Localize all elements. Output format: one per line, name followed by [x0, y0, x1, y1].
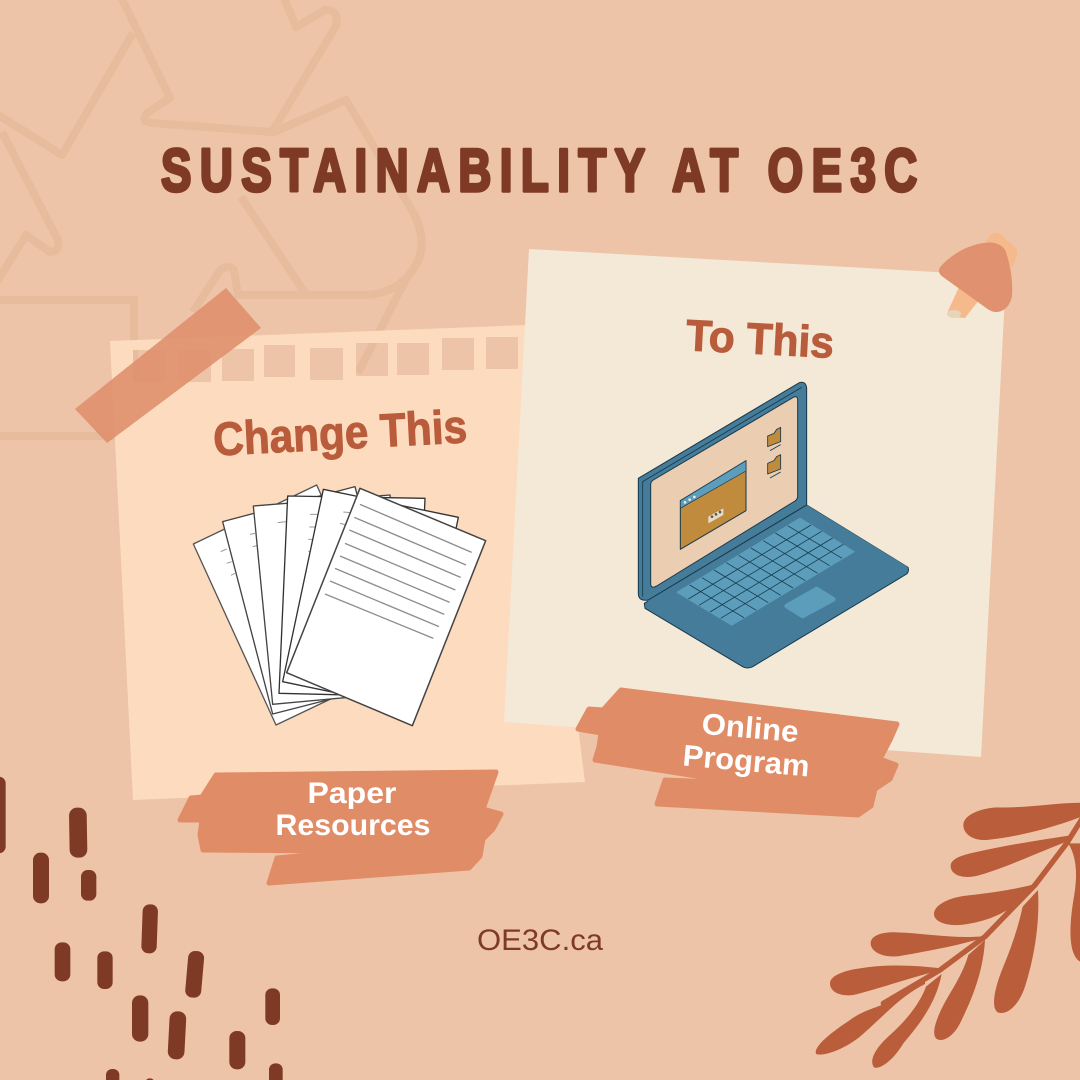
label: online program banner: Online — [700, 708, 800, 749]
website link text: OE3C.ca — [477, 924, 603, 957]
heading: to this: To This — [685, 311, 835, 368]
decoration: brown brush dashes — [0, 777, 283, 1080]
decoration: terracotta leaf branch — [816, 803, 1080, 1068]
panel: to this paper note — [504, 249, 1006, 757]
tape strip — [75, 288, 261, 443]
icon: push pin — [939, 233, 1017, 318]
icon: stack of paper sheets — [193, 485, 486, 726]
icon: laptop — [638, 382, 908, 668]
panel: change this paper note — [110, 325, 585, 800]
label: online program banner — [578, 690, 897, 815]
title: SUSTAINABILITY AT OE3C — [161, 138, 917, 205]
label: paper resources banner — [180, 772, 501, 883]
heading: change this: Change This — [212, 399, 468, 466]
label: paper resources banner: Paper — [308, 777, 397, 810]
label: online program banner: Program — [681, 740, 811, 783]
label: paper resources banner: Resources — [276, 809, 430, 842]
background recycling symbol — [0, 0, 422, 436]
